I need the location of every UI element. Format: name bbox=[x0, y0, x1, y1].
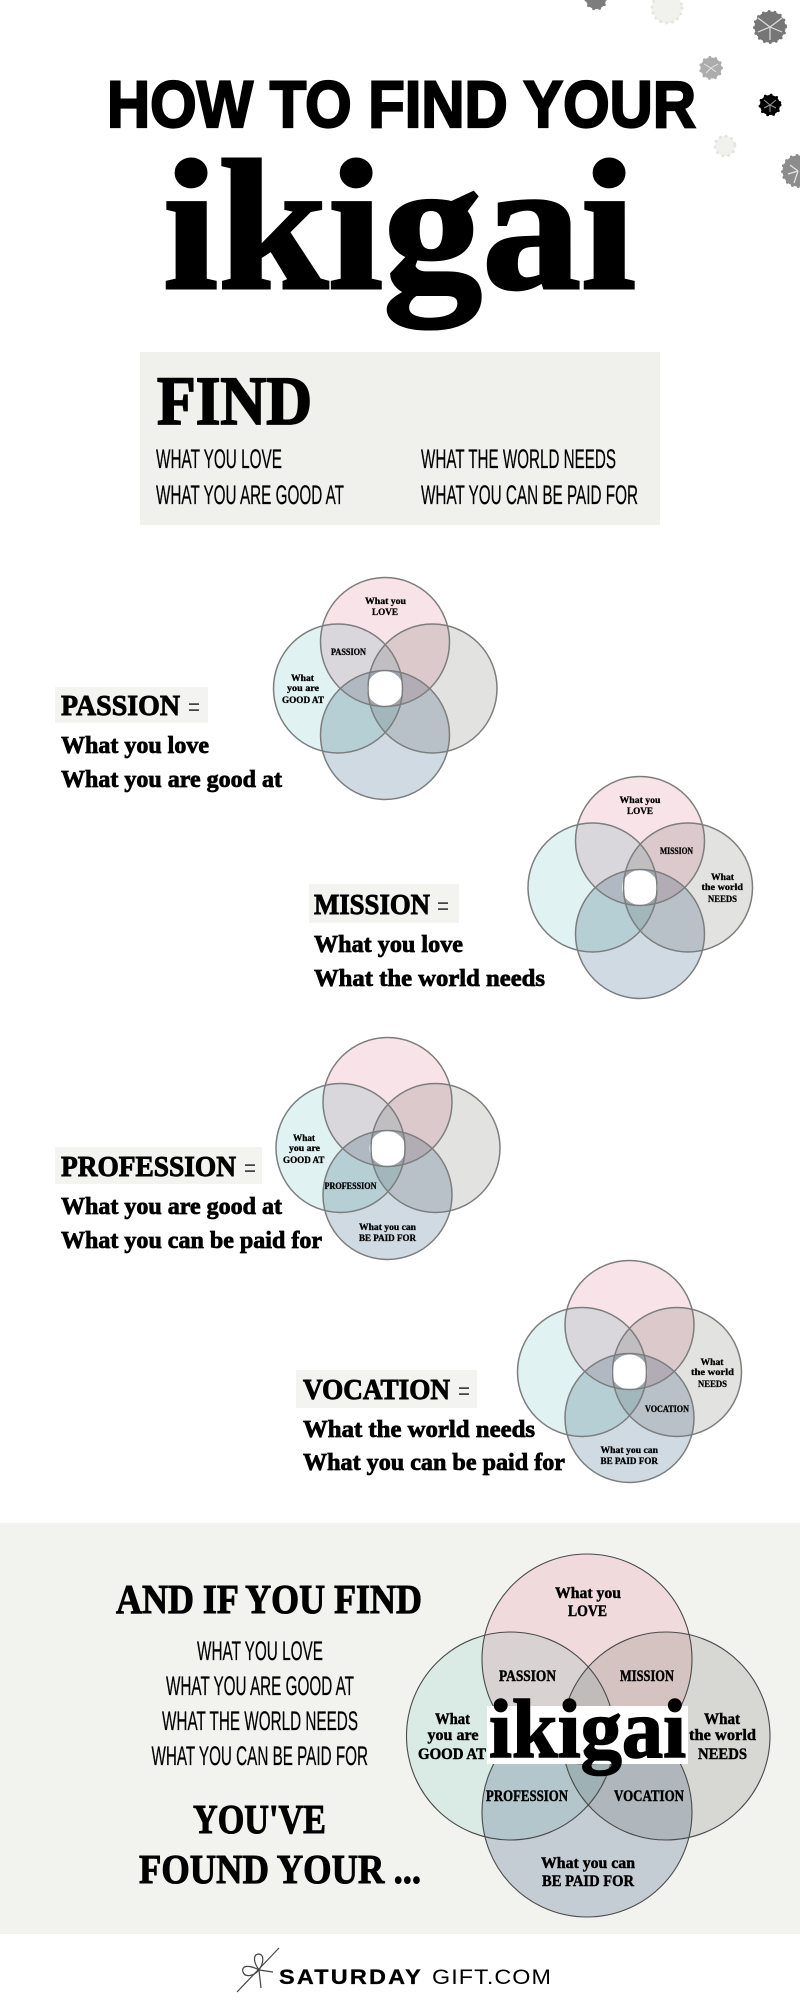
brand: gift.com: GIFT.COM bbox=[432, 1965, 552, 1989]
label box: passion bbox=[55, 687, 208, 723]
venn diagram: passion bbox=[274, 578, 497, 800]
text: what you can be paid for: WHAT YOU CAN BE PAID FOR bbox=[421, 480, 638, 510]
panel: find bbox=[140, 352, 660, 525]
text: what you love: What you love bbox=[61, 733, 209, 759]
venn diagram: mission: What you bbox=[620, 796, 661, 806]
venn diagram: profession bbox=[276, 1038, 500, 1260]
section: vocation bbox=[296, 1260, 742, 1482]
venn diagram: passion: What you bbox=[365, 597, 407, 607]
venn diagram: mission: the world bbox=[702, 883, 744, 893]
venn diagram: mission bbox=[528, 776, 752, 998]
label: what you are good at: What bbox=[435, 1711, 471, 1728]
footer logo bbox=[237, 1948, 552, 1992]
text: what you are good at: WHAT YOU ARE GOOD AT bbox=[166, 1671, 354, 1701]
label: what you love: What you bbox=[555, 1585, 621, 1602]
label: what you can be paid for bbox=[541, 1855, 635, 1890]
heading: and if you find: AND IF YOU FIND bbox=[116, 1576, 422, 1622]
text: what you are good at: What you are good at bbox=[61, 1194, 282, 1220]
text: what you love: WHAT YOU LOVE bbox=[197, 1636, 323, 1666]
text: what you love: What you love bbox=[314, 932, 463, 958]
label: passion: PASSION bbox=[499, 1668, 556, 1685]
venn diagram: vocation: the world bbox=[691, 1368, 735, 1378]
venn diagram: vocation bbox=[518, 1260, 742, 1482]
label: what the world needs bbox=[689, 1711, 756, 1763]
heading: profession: PROFESSION bbox=[61, 1151, 236, 1183]
venn diagram: vocation: NEEDS bbox=[698, 1380, 727, 1390]
text: what you love: WHAT YOU LOVE bbox=[156, 444, 282, 474]
icon: bow bbox=[237, 1948, 279, 1992]
venn diagram: passion: you are bbox=[287, 684, 319, 694]
equals sign: = bbox=[244, 1155, 256, 1182]
label: what you can be paid for: What you can bbox=[541, 1855, 635, 1872]
label box: vocation bbox=[296, 1370, 477, 1408]
label: what you love: LOVE bbox=[568, 1603, 607, 1620]
brand: saturday: SATURDAY bbox=[279, 1965, 423, 1989]
venn diagram: mission: MISSION bbox=[660, 847, 693, 857]
label: profession: PROFESSION bbox=[486, 1788, 568, 1805]
text: what you can be paid for: What you can be paid for bbox=[61, 1228, 322, 1254]
venn diagram: profession: PROFESSION bbox=[324, 1182, 377, 1192]
panel: conclusion bbox=[0, 1523, 800, 1934]
heading: passion: PASSION bbox=[61, 690, 180, 722]
heading: find: FIND bbox=[157, 363, 312, 439]
venn diagram: profession: you are bbox=[289, 1144, 320, 1154]
label: vocation: VOCATION bbox=[614, 1788, 684, 1805]
text: what the world needs: WHAT THE WORLD NEEDS bbox=[162, 1706, 358, 1736]
title: ikigai: ikigai bbox=[163, 123, 636, 329]
venn diagram: mission: What bbox=[711, 873, 735, 883]
venn diagram: profession: What you can bbox=[359, 1223, 417, 1233]
label: what you can be paid for: BE PAID FOR bbox=[542, 1873, 634, 1890]
venn diagram: profession: What bbox=[293, 1134, 316, 1144]
label box: mission bbox=[309, 884, 459, 923]
label: what the world needs: NEEDS bbox=[698, 1746, 747, 1763]
label: what you are good at: GOOD AT bbox=[418, 1746, 486, 1763]
text: what you can be paid for: WHAT YOU CAN BE PAID FOR bbox=[152, 1741, 368, 1771]
equals sign: = bbox=[458, 1378, 470, 1405]
equals sign: = bbox=[188, 694, 200, 721]
venn diagram: passion: LOVE bbox=[372, 608, 398, 618]
venn diagram: vocation: What you can bbox=[600, 1446, 659, 1456]
text: what the world needs: What the world needs bbox=[314, 966, 545, 992]
venn diagram: vocation: VOCATION bbox=[645, 1405, 689, 1415]
label: what you are good at: you are bbox=[428, 1727, 478, 1744]
label: what the world needs: the world bbox=[689, 1727, 756, 1744]
venn diagram: vocation: BE PAID FOR bbox=[600, 1457, 658, 1467]
venn diagram: profession: BE PAID FOR bbox=[359, 1234, 416, 1244]
section: profession bbox=[55, 1038, 500, 1260]
heading: you've: YOU'VE bbox=[193, 1796, 326, 1842]
venn diagram: mission: LOVE bbox=[627, 807, 653, 817]
text: what you can be paid for: What you can be paid for bbox=[303, 1450, 565, 1476]
label: what you love bbox=[555, 1585, 621, 1620]
venn diagram: passion: GOOD AT bbox=[282, 696, 325, 706]
white band behind ikigai bbox=[487, 1706, 688, 1764]
text: what the world needs: What the world needs bbox=[303, 1417, 535, 1443]
venn diagram: passion: PASSION bbox=[331, 648, 366, 658]
venn diagram: profession: GOOD AT bbox=[283, 1156, 325, 1166]
text: what you are good at: WHAT YOU ARE GOOD AT bbox=[156, 480, 344, 510]
text: what the world needs: WHAT THE WORLD NEEDS bbox=[421, 444, 616, 474]
venn diagram: mission: NEEDS bbox=[708, 895, 737, 905]
center word: ikigai: ikigai bbox=[489, 1683, 686, 1776]
heading: found your: FOUND YOUR ... bbox=[139, 1846, 421, 1892]
title: how to find your: HOW TO FIND YOUR bbox=[107, 67, 696, 141]
section: passion bbox=[55, 578, 497, 800]
text: what you are good at: What you are good at bbox=[61, 767, 282, 793]
venn diagram: vocation: What bbox=[700, 1358, 724, 1368]
equals sign: = bbox=[437, 893, 449, 920]
heading: vocation: VOCATION bbox=[303, 1374, 450, 1406]
label: what you are good at bbox=[418, 1711, 486, 1763]
confetti decorations bbox=[586, 0, 800, 186]
heading: mission: MISSION bbox=[314, 889, 430, 921]
section: mission bbox=[309, 776, 752, 998]
label: mission: MISSION bbox=[620, 1668, 674, 1685]
label box: profession bbox=[55, 1147, 262, 1184]
venn diagram: passion: What bbox=[291, 674, 315, 684]
venn diagram: ikigai bbox=[406, 1554, 770, 1917]
label: what the world needs: What bbox=[704, 1711, 741, 1728]
